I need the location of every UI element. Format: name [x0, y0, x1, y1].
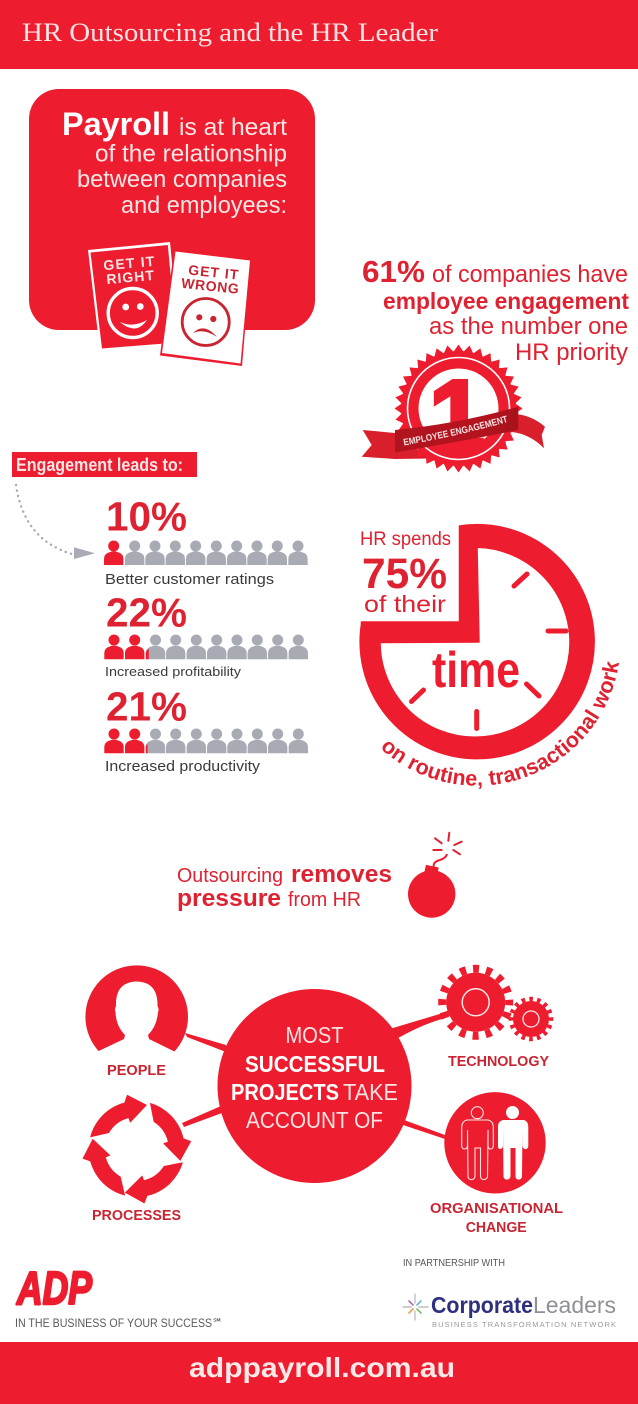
statistic: 61 percent engagement: 61% — [362, 254, 425, 289]
hr spends label: HR spends — [360, 529, 451, 550]
big numeral: 1 — [429, 360, 485, 472]
curved caption: on routine, transactional work — [382, 661, 620, 789]
callout: outsourcing removes pressure: from HR — [288, 888, 361, 911]
chart: clock 75 percent of time — [359, 524, 620, 789]
title: HR Outsourcing and the HR Leader — [22, 18, 438, 47]
statistic: 61 percent engagement: of companies have — [432, 261, 628, 288]
payroll statement — [62, 106, 287, 219]
clock ring — [360, 525, 594, 759]
organisational change label — [430, 1201, 563, 1236]
icon: organisational change figures — [430, 1092, 563, 1236]
payroll statement: of the relationship — [95, 140, 287, 168]
organisational change label: CHANGE — [466, 1220, 527, 1236]
card: get it wrong: GET IT — [188, 262, 240, 283]
central circle: most successful projects: TAKE — [343, 1079, 398, 1105]
people row 22 percent — [104, 634, 308, 659]
logo: ADP — [15, 1262, 223, 1330]
statistic: 21 percent increased productivity: 21% — [106, 684, 187, 730]
callout: outsourcing removes pressure: Outsourcing — [177, 864, 283, 887]
tagline: IN THE BUSINESS OF YOUR SUCCESS℠ — [15, 1316, 223, 1330]
processes label: PROCESSES — [92, 1208, 181, 1224]
payroll statement: and employees: — [121, 192, 287, 219]
filled figure — [498, 1106, 528, 1180]
statistic: 21 percent increased productivity: Increased productivity — [105, 758, 261, 775]
hr spends label: of their — [364, 591, 446, 617]
ribbon tails — [362, 414, 545, 459]
ribbon label: EMPLOYEE ENGAGEMENT — [403, 416, 507, 446]
card: get it wrong: WRONG — [181, 275, 240, 297]
rosette seal — [381, 331, 536, 486]
logo: Corporate Leaders: Corporate — [431, 1292, 533, 1318]
central circle: most successful projects: PROJECTS — [231, 1079, 339, 1105]
logo: Corporate Leaders — [403, 1292, 616, 1329]
payroll statement: between companies — [77, 166, 287, 193]
star mark — [403, 1294, 428, 1320]
statistic: 22 percent increased profitability — [104, 590, 308, 679]
central circle: most successful projects: SUCCESSFUL — [245, 1051, 385, 1077]
connector lines — [182, 1012, 449, 1139]
central circle: most successful projects: MOST — [286, 1022, 344, 1048]
statistic: 10 percent better customer ratings — [104, 494, 308, 588]
callout: outsourcing removes pressure: removes — [291, 861, 392, 888]
partnership label: IN PARTNERSHIP WITH — [403, 1257, 505, 1269]
statistic: 22 percent increased profitability: 22% — [106, 590, 187, 636]
icon: people silhouette — [80, 965, 195, 1079]
logo: ADP: ADP — [16, 1262, 92, 1314]
time word: time — [432, 642, 520, 698]
panel: payroll — [29, 89, 315, 366]
website address: adppayroll.com.au — [189, 1352, 455, 1383]
header banner — [0, 0, 638, 69]
people label: PEOPLE — [107, 1063, 166, 1079]
heading: engagement leads to: Engagement leads to: — [16, 455, 183, 475]
payroll statement: is at heart — [179, 114, 287, 141]
people row 21 percent — [104, 728, 308, 753]
hr spends label: 75% — [362, 550, 447, 598]
statistic: 22 percent increased profitability: Increased profitability — [105, 664, 242, 679]
statistic: 10 percent better customer ratings: 10% — [106, 494, 187, 540]
central circle: most successful projects: ACCOUNT OF — [246, 1107, 383, 1133]
hr spends label — [360, 529, 451, 617]
statistic: 61 percent engagement — [362, 254, 629, 366]
arrow: dotted curve — [16, 485, 95, 559]
callout: outsourcing removes pressure — [177, 861, 392, 912]
callout: outsourcing removes pressure: pressure — [177, 885, 281, 912]
outlined figure — [462, 1107, 493, 1180]
statistic: 61 percent engagement: employee engagement — [383, 288, 629, 314]
statistic: 61 percent engagement: as the number one — [429, 313, 628, 340]
footer banner — [0, 1342, 638, 1404]
logo: Corporate Leaders: BUSINESS TRANSFORMATION NETWORK — [432, 1320, 616, 1329]
statistic: 21 percent increased productivity — [104, 684, 308, 775]
clock ticks — [412, 574, 566, 728]
icon: bomb — [408, 833, 462, 918]
icon: processes cycle arrows — [82, 1095, 192, 1224]
logo: Corporate Leaders: Leaders — [533, 1292, 616, 1318]
card: get it wrong — [160, 250, 251, 366]
ribbon band — [395, 407, 518, 452]
organisational change label: ORGANISATIONAL — [430, 1201, 563, 1217]
central circle: most successful projects — [218, 989, 412, 1183]
statistic: 10 percent better customer ratings: Better customer ratings — [105, 571, 274, 588]
card: get it right: RIGHT — [106, 267, 155, 287]
technology label: TECHNOLOGY — [448, 1054, 549, 1070]
card: get it right — [88, 242, 180, 351]
people row 10 percent — [104, 540, 308, 565]
icon: technology gears — [442, 969, 551, 1070]
payroll statement: Payroll — [62, 106, 170, 142]
card: get it right: GET IT — [103, 253, 156, 273]
icon: number one rosette with ribbon — [362, 344, 545, 472]
statistic: 61 percent engagement: HR priority — [515, 339, 628, 366]
